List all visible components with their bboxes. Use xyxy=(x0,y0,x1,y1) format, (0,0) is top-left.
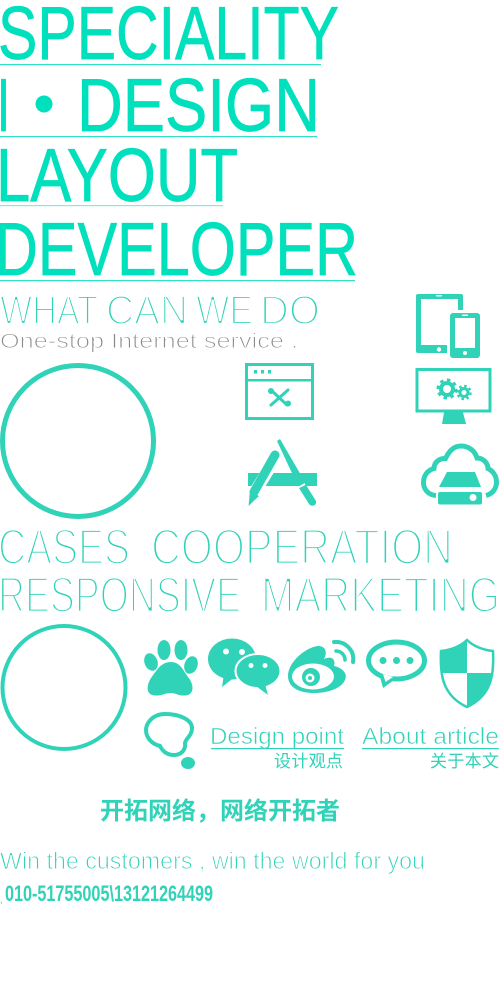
icon: browser window with tools xyxy=(246,364,313,418)
title: speciality i design layout developer: DEVELOPER xyxy=(0,207,358,291)
phone numbers: 010-51755005\13121264499 xyxy=(5,881,213,906)
subheading: one-stop internet service: One-stop Internet service . xyxy=(0,330,298,353)
phone numbers: , xyxy=(0,895,3,905)
small circle outline xyxy=(2,626,126,749)
title: speciality i design layout developer xyxy=(0,0,358,291)
heading: what can we do: DO xyxy=(260,287,320,333)
icon: shield xyxy=(440,640,493,707)
heading: what can we do: WE xyxy=(196,287,253,333)
title: speciality i design layout developer: DESIGN xyxy=(77,63,320,147)
icon: wechat xyxy=(208,638,280,695)
link: design point xyxy=(210,723,345,771)
icon: cloud server xyxy=(424,446,496,504)
icon: tablet and phone xyxy=(416,294,480,358)
heading: what can we do: WHAT xyxy=(0,287,98,333)
link: about article: 关于本文 xyxy=(430,752,499,771)
link: design point: Design point xyxy=(210,723,345,749)
link: about article: About article xyxy=(362,723,499,749)
slogan chinese: 开拓网络，网络开拓者 xyxy=(100,797,340,825)
icon: monitor with gears xyxy=(417,370,490,424)
heading: cases cooperation responsive marketing: RESPONSIVE xyxy=(0,567,241,623)
link: about article xyxy=(362,723,499,771)
heading: what can we do: CAN xyxy=(106,287,188,333)
heading: cases cooperation responsive marketing: CASES xyxy=(0,519,130,575)
icon: paw xyxy=(142,640,200,696)
icon: speech bubble xyxy=(368,642,424,688)
heading: what can we do xyxy=(0,287,320,333)
title: speciality i design layout developer: LAYOUT xyxy=(0,133,238,217)
heading: cases cooperation responsive marketing xyxy=(0,519,500,623)
slogan english: Win the customers , win the world for you xyxy=(0,848,425,875)
large circle outline xyxy=(2,366,154,516)
link: design point: 设计观点 xyxy=(274,752,343,771)
icon: thought bubble xyxy=(146,714,195,769)
icon: weibo xyxy=(288,642,353,693)
icon: pencil and ruler app xyxy=(248,439,317,506)
